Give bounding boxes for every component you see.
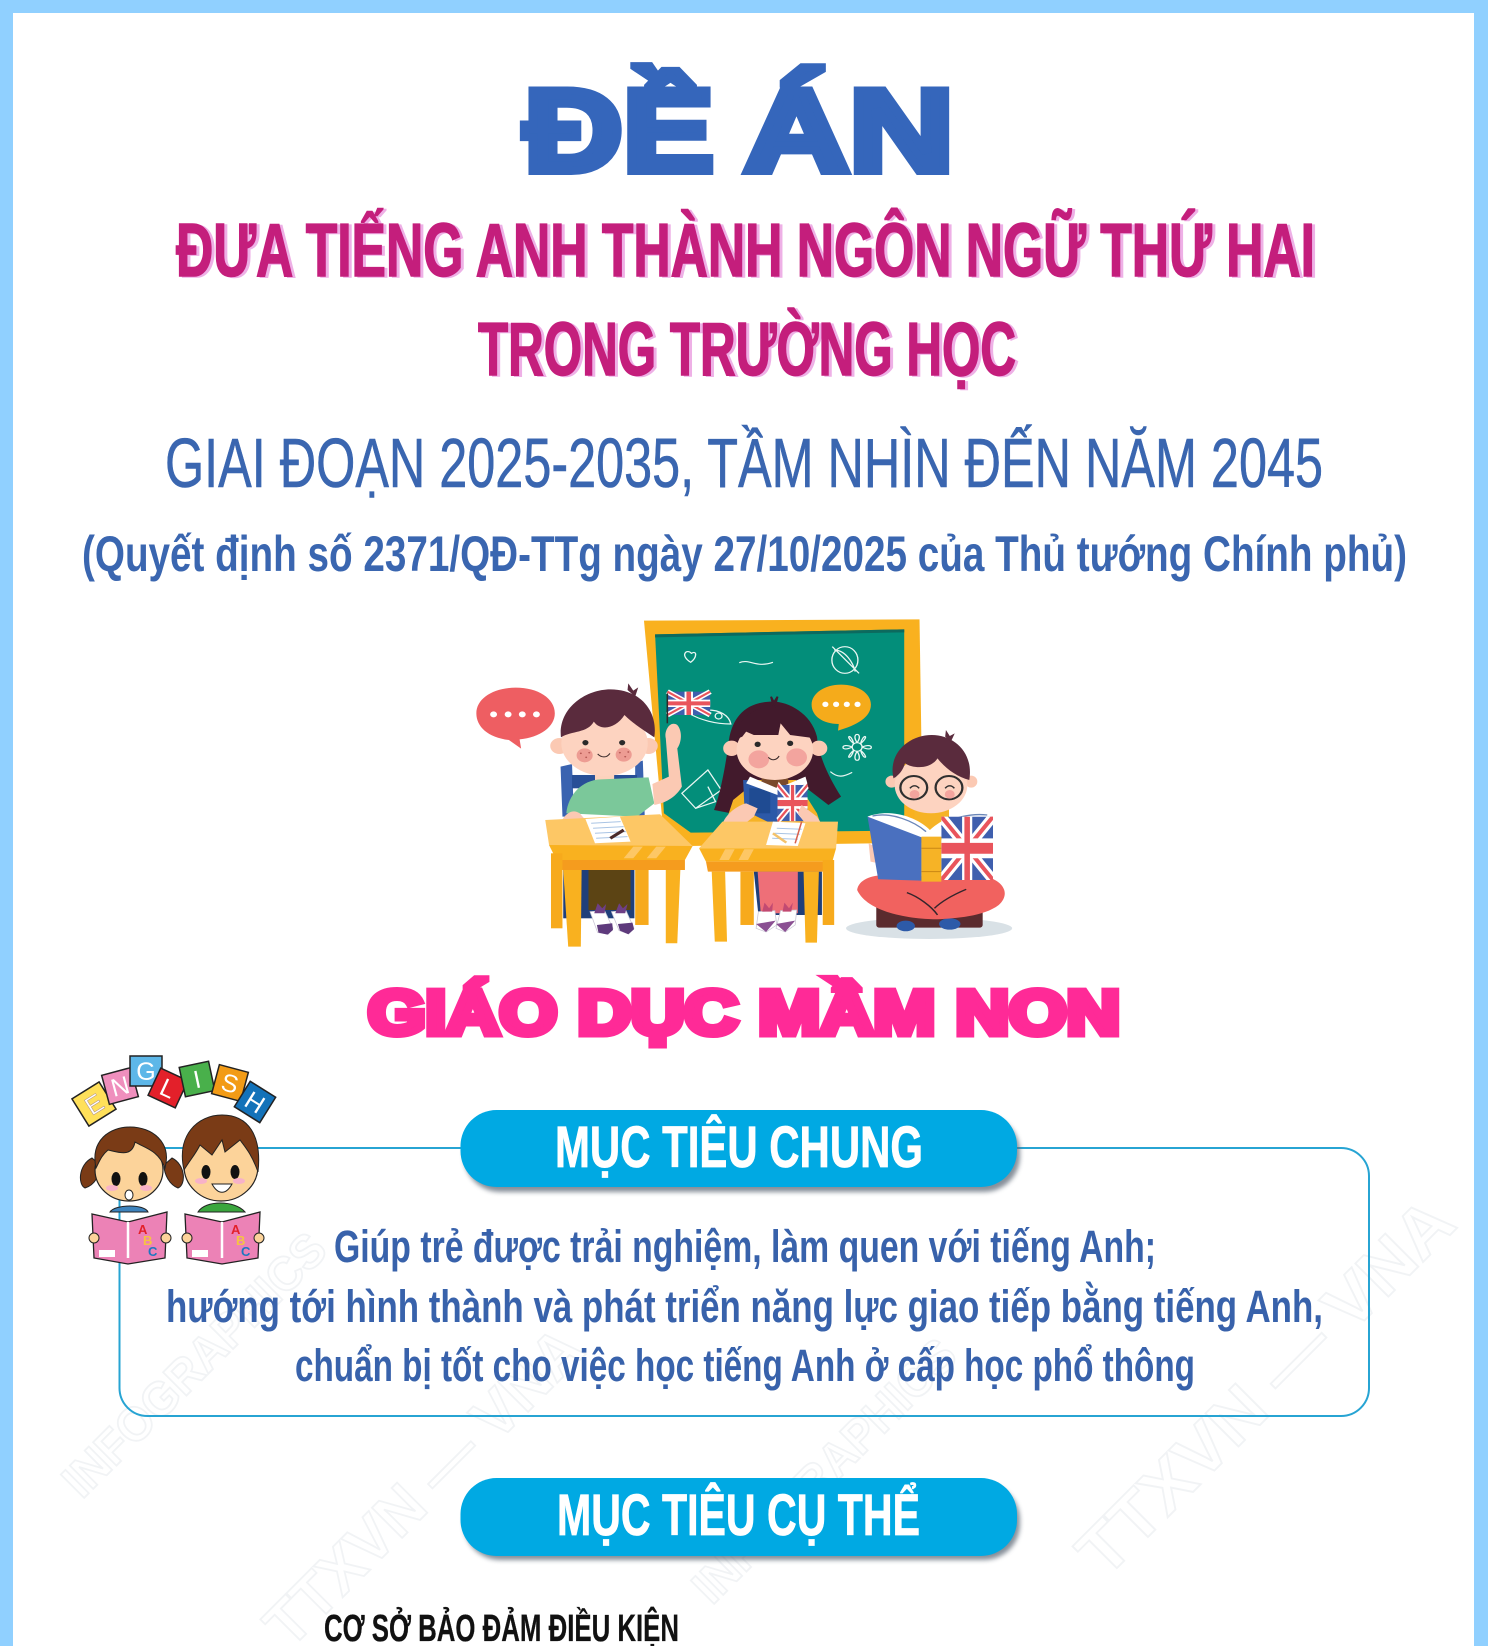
letter blocks: ENGLISH: H [239, 1086, 270, 1120]
icon: blackboard [644, 619, 923, 846]
letter blocks: ENGLISH: L [155, 1073, 180, 1105]
boy: C [241, 1244, 251, 1259]
letter blocks: ENGLISH: G [136, 1058, 156, 1086]
heading: project name: TRONG TRƯỜNG HỌC [481, 308, 1019, 392]
watermarks: INFOGRAPHICS [52, 1223, 337, 1508]
panel text: Giúp trẻ được trải nghiệm, làm quen với tiếng Anh; [334, 1221, 1156, 1272]
watermarks: INFOGRAPHICS [682, 1329, 967, 1614]
pill heading: specific objectives: MỤC TIÊU CỤ THỂ [557, 1483, 920, 1548]
icon: two kids reading under ENGLISH letters [72, 1056, 276, 1264]
panel text [166, 1221, 1323, 1391]
girl: A [138, 1222, 148, 1237]
watermarks: TTXVN — VNA [1062, 1183, 1469, 1591]
title: ĐỀ ÁN: ÁN [744, 65, 954, 196]
pill heading: general objective: MỤC TIÊU CHUNG [555, 1115, 923, 1180]
title: ĐỀ ÁN [524, 65, 954, 196]
girl: C [148, 1244, 158, 1259]
boy: A [231, 1222, 241, 1237]
letter blocks: ENGLISH: S [218, 1068, 241, 1100]
boy: B [236, 1233, 245, 1248]
character: boy raising flag [550, 683, 682, 935]
section title: preschool education: GIÁO DỤC MẦM NON [368, 979, 1120, 1048]
letter blocks: ENGLISH: N [108, 1071, 133, 1103]
pill heading: specific objectives [460, 1478, 1020, 1560]
watermarks [52, 1183, 1469, 1646]
letter blocks: ENGLISH: E [80, 1089, 109, 1121]
character: boy reading on floor [846, 730, 1012, 939]
illustration: children learning English in class [476, 619, 1012, 947]
title: ĐỀ ÁN: ĐỀ [524, 65, 714, 196]
pill heading: general objective [460, 1110, 1020, 1192]
icon: yellow speech bubble [812, 685, 871, 731]
panel text: chuẩn bị tốt cho việc học tiếng Anh ở cấp học phổ thông [295, 1340, 1195, 1391]
panel outline [120, 1148, 1369, 1416]
letter blocks: ENGLISH: I [191, 1066, 204, 1094]
panel: general objective [120, 1148, 1369, 1416]
boy [182, 1115, 264, 1264]
icon: right desk [699, 822, 838, 943]
character: girl with book [714, 697, 841, 932]
letter blocks: ENGLISH [72, 1056, 276, 1126]
icon: British flag on board [667, 692, 710, 715]
icon: left desk [545, 814, 693, 947]
heading: project name: TRONG TRƯỜNG HỌC [478, 307, 1016, 391]
girl: B [143, 1233, 152, 1248]
heading: project name [176, 208, 1318, 392]
icon: red speech bubble [476, 688, 555, 749]
girl [80, 1127, 183, 1264]
